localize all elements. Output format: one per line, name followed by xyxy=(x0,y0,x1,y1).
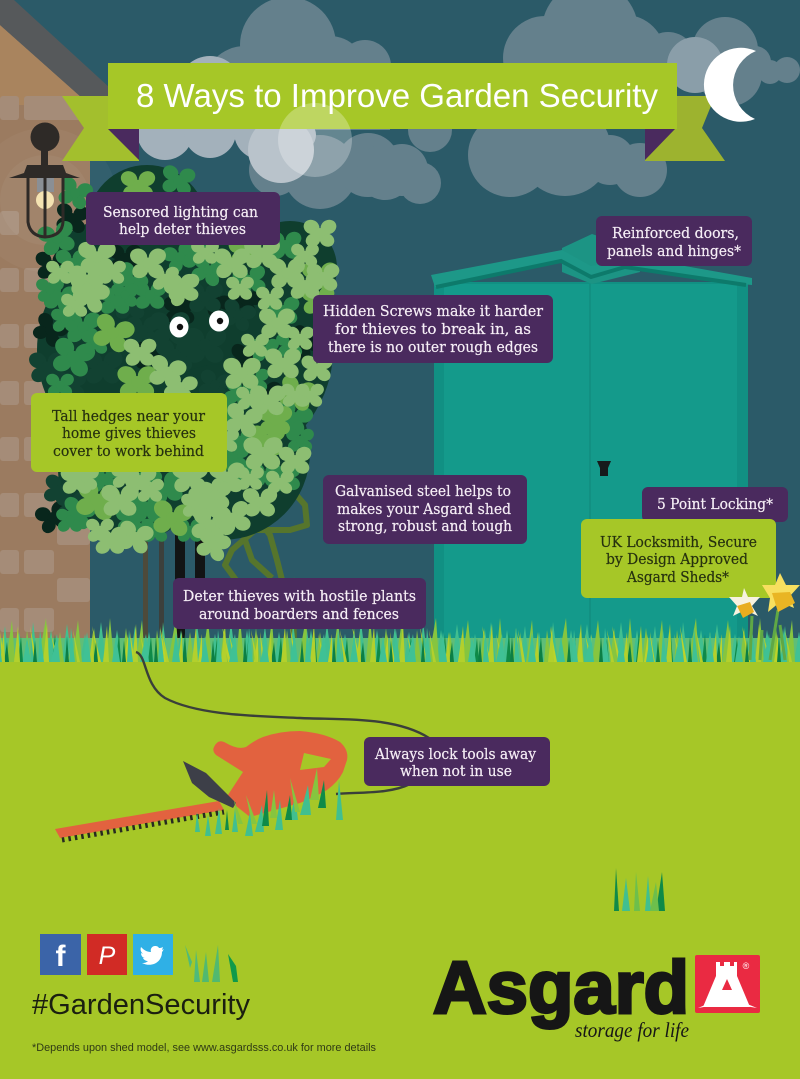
small grass clump by icons xyxy=(185,945,238,982)
tree trunks xyxy=(143,530,205,655)
callout: tall hedges: home gives thieves xyxy=(62,424,196,442)
hashtag: #GardenSecurity xyxy=(32,989,250,1021)
garden shed xyxy=(431,234,752,642)
wall lamp xyxy=(9,122,80,237)
lawn xyxy=(0,662,800,1079)
moon xyxy=(704,48,756,122)
Asgard logo xyxy=(433,946,760,1042)
daffodils xyxy=(729,573,800,618)
callout: approved sheds: UK Locksmith, Secure xyxy=(600,533,757,551)
logo red badge: ® xyxy=(743,961,750,971)
hand guard xyxy=(183,761,236,808)
daffodil stems xyxy=(750,610,785,660)
callout: approved sheds xyxy=(581,519,776,598)
handle body xyxy=(213,731,347,817)
callout: tall hedges: Tall hedges near your xyxy=(52,407,206,425)
hedge with leaves xyxy=(26,161,342,567)
callout: reinforced doors xyxy=(596,216,752,266)
callout: tall hedges: cover to work behind xyxy=(53,442,204,460)
callout: hidden screws xyxy=(313,295,553,363)
blade xyxy=(55,801,224,838)
grass clump over trimmer xyxy=(195,768,343,836)
logo red badge xyxy=(695,955,760,1013)
callout: hidden screws: there is no outer rough edges xyxy=(328,338,538,356)
callout: hidden screws: for thieves to break in, as xyxy=(335,320,531,338)
callout: hostile plants: Deter thieves with hostile plants xyxy=(183,587,416,605)
logo tagline: storage for life xyxy=(575,1018,689,1042)
right ribbon tail xyxy=(645,96,725,161)
callout: galvanised steel: strong, robust and tough xyxy=(338,517,512,535)
hedge trimmer xyxy=(55,652,429,840)
power cable xyxy=(136,652,429,738)
icon: facebook: f xyxy=(56,940,66,973)
callout: lock tools away: Always lock tools away xyxy=(374,745,536,763)
callout: sensored lighting: Sensored lighting can xyxy=(103,203,258,221)
callout: sensored lighting xyxy=(86,192,280,245)
grass strip xyxy=(0,612,800,662)
title banner xyxy=(62,63,725,177)
callout: lock tools away: when not in use xyxy=(400,762,512,780)
left ribbon tail xyxy=(62,96,139,161)
door lock xyxy=(597,461,611,476)
callout: approved sheds: by Design Approved xyxy=(606,550,748,568)
Asgard logo: Asgard xyxy=(433,946,689,1029)
hostile climbing plant xyxy=(225,480,307,640)
callout: hostile plants: around boarders and fences xyxy=(199,605,399,623)
footnote: *Depends upon shed model, see www.asgardsss.co.uk for more details xyxy=(32,1042,376,1054)
clouds xyxy=(137,0,800,209)
icon: pinterest: P xyxy=(99,942,116,970)
title text: 8 Ways to Improve Garden Security xyxy=(136,77,658,114)
callout: approved sheds: Asgard Sheds* xyxy=(626,568,729,586)
callout: sensored lighting: help deter thieves xyxy=(119,220,246,238)
callout: 5 point locking xyxy=(642,487,788,522)
house wall xyxy=(0,0,117,660)
small grass clump xyxy=(614,868,665,911)
callout: tall hedges xyxy=(31,393,227,472)
hidden intruder eyes xyxy=(170,310,229,338)
callout: 5 point locking: 5 Point Locking* xyxy=(657,495,773,513)
callout: galvanised steel xyxy=(323,475,527,544)
callout: reinforced doors: Reinforced doors, xyxy=(612,224,739,242)
callout: lock tools away xyxy=(364,737,550,786)
callout: hidden screws: Hidden Screws make it harder xyxy=(323,302,544,320)
icon: twitter xyxy=(133,934,173,975)
callout: galvanised steel: makes your Asgard shed xyxy=(337,500,511,518)
social icons xyxy=(40,934,173,975)
roof edge xyxy=(0,0,110,98)
callout: galvanised steel: Galvanised steel helps to xyxy=(335,482,511,500)
callout: hostile plants xyxy=(173,578,426,629)
callout: reinforced doors: panels and hinges* xyxy=(607,242,741,260)
